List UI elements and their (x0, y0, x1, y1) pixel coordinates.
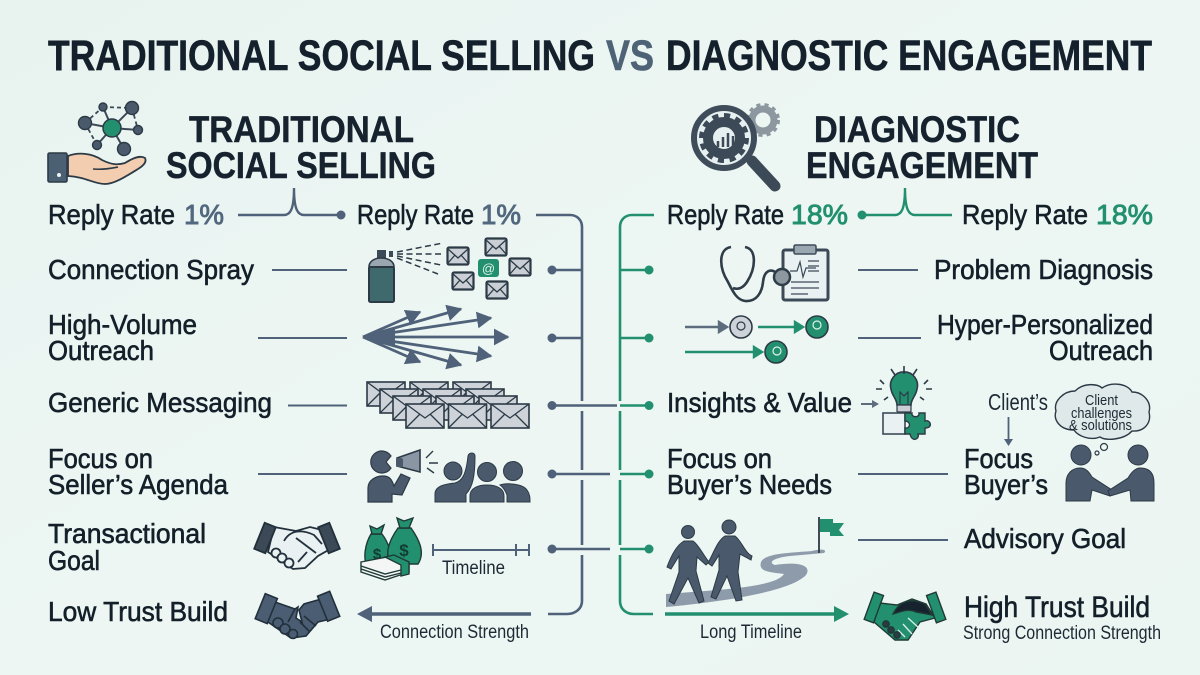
heading: traditional social selling (166, 109, 436, 186)
title: TRADITIONAL SOCIAL SELLING (48, 32, 595, 80)
icon: hand with network (48, 102, 146, 184)
right reply rate with bracket: 18% (791, 199, 848, 230)
icon: money bags and cash (361, 518, 421, 580)
label: focus on buyer's needs (667, 443, 948, 500)
icon: spray can and envelopes: @ (482, 261, 495, 276)
label: high-volume outreach: High-Volume (48, 309, 197, 340)
label: focus on seller's agenda: Focus on (48, 443, 153, 474)
arrow: connection strength: Connection Strength (380, 622, 529, 643)
label: high-volume outreach: Outreach (48, 335, 154, 366)
left connector spine (536, 215, 617, 614)
label: hyper-personalized outreach: Hyper-Personalized (937, 309, 1153, 340)
label: hyper-personalized outreach: Outreach (1049, 335, 1153, 366)
heading: diagnostic engagement: DIAGNOSTIC (814, 109, 1020, 150)
label: transactional goal: Transactional (48, 518, 206, 549)
icon: magnifier with gears (694, 105, 778, 186)
label: transactional goal: Goal (48, 545, 100, 576)
right reply rate with bracket (667, 188, 1153, 230)
icon: light handshake (254, 523, 340, 569)
icon: megaphone speaker and crowd (368, 450, 530, 502)
timeline bar: Timeline (442, 558, 505, 579)
label: transactional goal (48, 518, 206, 576)
label: focus on buyer's needs: Focus on (667, 443, 772, 474)
right connector spine (620, 215, 654, 614)
left reply rate with bracket: 1% (184, 199, 224, 230)
icon: broken dark handshake (255, 591, 340, 638)
right reply rate with bracket: Reply Rate (667, 199, 784, 230)
left reply rate with bracket (48, 188, 521, 230)
thought cloud: & solutions (1069, 418, 1132, 434)
left reply rate with bracket: Reply Rate (48, 199, 175, 230)
heading: traditional social selling: SOCIAL SELLING (166, 145, 436, 186)
title (48, 32, 1152, 80)
arrow: long timeline (665, 606, 849, 643)
icon: stethoscope and clipboard (721, 245, 828, 301)
label: focus on buyer's needs: Buyer’s Needs (667, 469, 832, 500)
label: connection spray: Connection Spray (48, 254, 254, 285)
icon: lightbulb and puzzle (876, 366, 932, 439)
label: high trust build: Strong Connection Strength (963, 623, 1161, 644)
arrow: long timeline: Long Timeline (700, 622, 802, 643)
label: focus on seller's agenda (48, 443, 347, 500)
icon: green handshake (864, 592, 946, 640)
label: high-volume outreach (48, 309, 347, 366)
left reply rate with bracket: Reply Rate (357, 199, 474, 230)
label: focus buyer's (964, 443, 1048, 500)
label: client's with down arrow: Client’s (988, 389, 1048, 415)
thought cloud (1055, 384, 1150, 439)
left reply rate with bracket: 1% (481, 199, 521, 230)
label: focus on seller's agenda: Seller’s Agenda (48, 469, 228, 500)
icon: arrows fan (363, 309, 508, 365)
icon: personalized arrows (685, 316, 828, 363)
label: advisory goal: Advisory Goal (964, 523, 1126, 554)
icon: two people shaking hands (1066, 444, 1154, 501)
icon: walkers on road to flag (666, 517, 844, 607)
right reply rate with bracket: 18% (1096, 199, 1153, 230)
icon: money bags and cash: $ (373, 546, 382, 563)
timeline bar (433, 544, 529, 579)
label: hyper-personalized outreach (858, 309, 1153, 366)
label: high trust build (963, 591, 1161, 644)
label: low trust build: Low Trust Build (48, 596, 228, 627)
heading: traditional social selling: TRADITIONAL (189, 109, 414, 150)
thought cloud: challenges (1071, 406, 1132, 422)
heading: diagnostic engagement: ENGAGEMENT (806, 145, 1038, 186)
icon: spray can and envelopes (369, 238, 530, 302)
label: focus buyer's: Focus (964, 443, 1033, 474)
thought cloud: Client (1085, 393, 1118, 409)
right reply rate with bracket: Reply Rate (962, 199, 1088, 230)
label: generic messaging: Generic Messaging (48, 387, 272, 418)
label: focus buyer's: Buyer’s (964, 469, 1048, 500)
icon: envelope stacks (367, 382, 529, 428)
label: insights and value: Insights & Value (667, 387, 852, 418)
title: VS (606, 32, 654, 80)
label: high trust build: High Trust Build (964, 591, 1150, 624)
arrow: connection strength (357, 606, 531, 643)
heading: diagnostic engagement (806, 109, 1038, 186)
label: client's with down arrow (988, 389, 1048, 446)
icon: money bags and cash: $ (399, 541, 409, 560)
label: problem diagnosis: Problem Diagnosis (934, 254, 1153, 285)
